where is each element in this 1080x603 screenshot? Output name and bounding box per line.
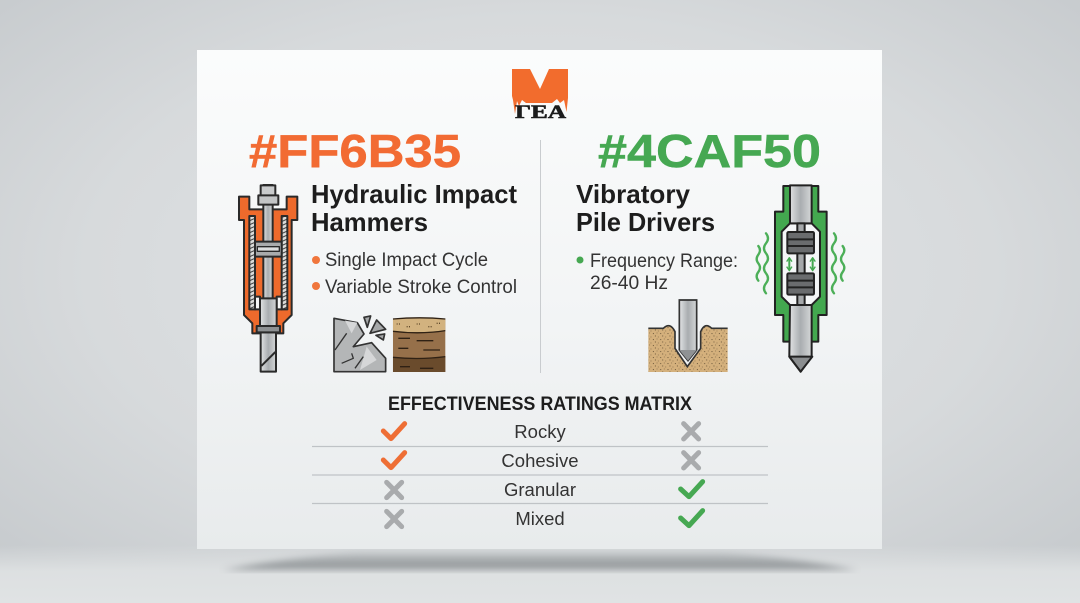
icon: hydraulic hammer: [239, 185, 297, 372]
heading: orange hex: #FF6B35: [249, 125, 461, 177]
heading: hydraulic impact hammers: Hydraulic Impact: [311, 179, 517, 209]
icon: fractured rock: [334, 316, 386, 372]
soil labels: Rocky: [514, 421, 566, 442]
soil labels: Granular: [504, 479, 576, 500]
heading: matrix title: EFFECTIVENESS RATINGS MATRIX: [388, 394, 692, 415]
icon: vibratory driver: [775, 185, 827, 372]
card shadow: [222, 553, 858, 570]
panel: effectiveness matrix: [312, 394, 768, 529]
soil labels: Mixed: [515, 508, 565, 529]
heading: hydraulic impact hammers: Hammers: [311, 207, 428, 237]
icon: pile in sand: [648, 300, 728, 372]
bullet list: driver features: Frequency Range:: [590, 251, 738, 272]
icon: soil layers: [393, 318, 445, 372]
logo wordmark: ΓEA: [515, 102, 566, 123]
bullet list: hammer features: [312, 250, 517, 298]
bullet list: hammer features: Variable Stroke Control: [325, 277, 517, 298]
panel: vibratory pile drivers: [576, 179, 844, 372]
rating marks: [383, 424, 703, 527]
heading: vibratory pile drivers: Vibratory: [576, 179, 691, 209]
bullet list: driver features: [576, 251, 738, 294]
heading: green hex: #4CAF50: [598, 125, 821, 177]
center divider: [540, 140, 541, 373]
logo: [512, 69, 568, 123]
card panel: [197, 50, 882, 549]
bullet list: hammer features: Single Impact Cycle: [325, 250, 488, 271]
icon: vibration waves: [757, 233, 844, 293]
heading: vibratory pile drivers: Pile Drivers: [576, 207, 715, 237]
soil labels: [501, 421, 579, 529]
soil labels: Cohesive: [501, 450, 579, 471]
logo mark: orange M: [512, 69, 568, 114]
panel: hydraulic impact hammers: [239, 179, 517, 372]
floor: [0, 545, 1080, 603]
bullet list: driver features: 26-40 Hz: [590, 273, 668, 294]
row dividers: [312, 446, 768, 504]
